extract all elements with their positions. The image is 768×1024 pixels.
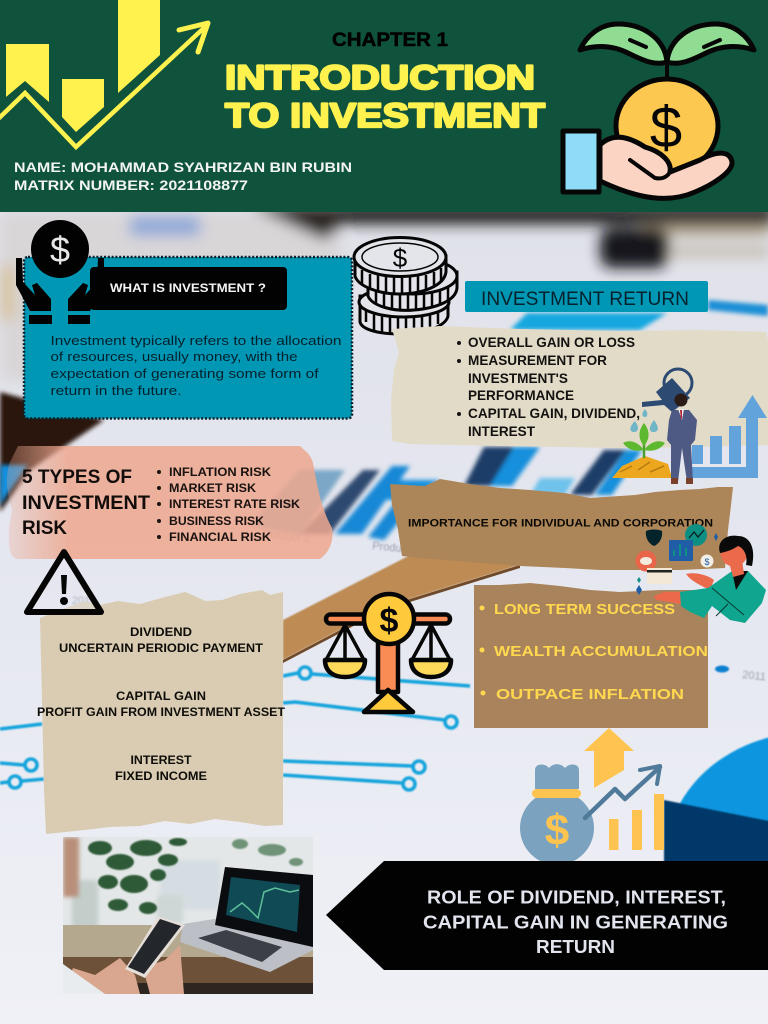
chapter label: CHAPTER 1 (332, 30, 448, 51)
definition text: Investment typically refers to the allocation (50, 333, 342, 348)
risk heading: RISK (22, 517, 67, 539)
photo: phone and laptop trading charts (63, 837, 313, 994)
income type text: DIVIDEND (130, 627, 192, 639)
income type text: UNCERTAIN PERIODIC PAYMENT (59, 643, 263, 655)
income type text (37, 627, 285, 783)
return bullet list: MEASUREMENT FOR (468, 352, 607, 368)
icon: balance scale: $ (380, 602, 399, 640)
icon: stacked coins: $ (393, 243, 408, 273)
background photo of financial charts: 2011 (742, 669, 766, 683)
heading: investment return (465, 281, 708, 312)
title (225, 59, 545, 135)
background photo of financial charts (0, 212, 768, 861)
risk heading: INVESTMENT (22, 492, 150, 514)
background photo of financial charts: 2011 (72, 595, 96, 607)
arrow: upward yellow (584, 728, 634, 788)
panel: investment return notes (391, 326, 768, 448)
icon: money bag with rising chart (520, 764, 664, 865)
return bullet list: PERFORMANCE (468, 387, 574, 403)
risk list: MARKET RISK (169, 481, 256, 495)
background photo of financial charts: Product (372, 540, 411, 556)
callout text: ROLE OF DIVIDEND, INTEREST, (427, 888, 726, 908)
icon: money bag with rising chart: $ (545, 806, 569, 855)
heading: what is investment: WHAT IS INVESTMENT ? (110, 281, 266, 295)
risk list: FINANCIAL RISK (169, 530, 271, 544)
return bullet list (457, 334, 640, 439)
icon: growth chart with arrow (0, 0, 208, 147)
callout text: CAPITAL GAIN IN GENERATING (423, 912, 728, 932)
income type text: FIXED INCOME (115, 771, 207, 783)
icon: stacked coins (354, 238, 457, 334)
income type text: CAPITAL GAIN (116, 691, 206, 703)
icon: hands holding dollar coin (16, 220, 104, 324)
benefits list: OUTPACE INFLATION (496, 686, 684, 703)
return bullet list: CAPITAL GAIN, DIVIDEND, (468, 405, 640, 421)
callout text: RETURN (536, 937, 615, 957)
return bullet list: INVESTMENT'S (468, 370, 568, 386)
icon: hands holding dollar coin: $ (50, 229, 70, 270)
icon: investor watering coin plant with growth chart (612, 369, 767, 484)
definition text (50, 333, 342, 398)
income type text: PROFIT GAIN FROM INVESTMENT ASSET (37, 707, 285, 719)
definition text: expectation of generating some form of (50, 366, 319, 381)
title: TO INVESTMENT (225, 97, 545, 135)
panel: importance for individual and corporation: IMPORTANCE FOR INDIVIDUAL AND CORPORATION (408, 518, 713, 530)
risk list: BUSINESS RISK (169, 514, 264, 528)
risk heading: 5 TYPES OF (22, 466, 132, 488)
heading: what is investment (90, 267, 287, 310)
icon: person presenting finance symbols (636, 524, 766, 623)
benefits list (480, 601, 708, 703)
icon: person presenting finance symbols: $ (704, 557, 710, 567)
return bullet list: INTEREST (468, 423, 535, 439)
risk list: INTEREST RATE RISK (169, 497, 300, 511)
author details: MATRIX NUMBER: 2021108877 (14, 177, 248, 193)
risk heading (22, 466, 150, 539)
panel: what is investment (16, 220, 352, 418)
benefits list: LONG TERM SUCCESS (494, 601, 675, 618)
icon: balance scale (325, 594, 451, 712)
definition text: of resources, usually money, with the (50, 349, 298, 364)
panel: benefits of investing (474, 583, 708, 728)
background photo of financial charts: Product 2 (262, 528, 310, 545)
risk list: INFLATION RISK (169, 465, 271, 479)
panel: 5 types of investment risk (7, 446, 332, 559)
income type text: INTEREST (130, 755, 192, 767)
benefits list: WEALTH ACCUMULATION (494, 643, 708, 660)
heading: investment return: INVESTMENT RETURN (481, 289, 689, 310)
risk list (157, 465, 300, 544)
callout text (423, 888, 728, 957)
header band (0, 0, 768, 212)
title: INTRODUCTION (225, 59, 535, 97)
icon: warning triangle (27, 552, 101, 612)
return bullet list: OVERALL GAIN OR LOSS (468, 334, 635, 350)
icon: hand holding coin with sprout: $ (650, 95, 682, 160)
panel: dividend, capital gain, interest notes (37, 590, 285, 834)
panel: importance for individual and corporation (390, 479, 733, 570)
icon: hand holding coin with sprout (563, 24, 754, 198)
definition text: return in the future. (50, 383, 182, 398)
author details: NAME: MOHAMMAD SYAHRIZAN BIN RUBIN (14, 159, 352, 175)
callout: role of dividend, interest and capital gain (326, 861, 768, 970)
author details (14, 159, 352, 193)
